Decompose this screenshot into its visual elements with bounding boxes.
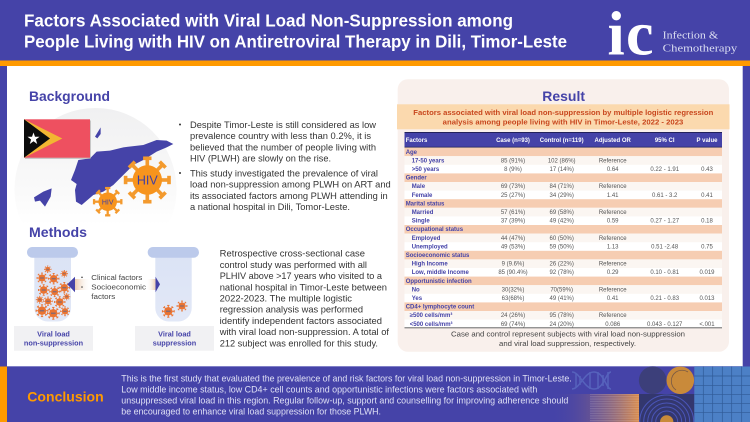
table header: P value bbox=[697, 138, 718, 144]
background text: This study investigated the prevalence of viral bbox=[190, 167, 378, 178]
factor list: factors bbox=[91, 292, 116, 301]
section: marital status: 57 (61%) bbox=[501, 210, 525, 216]
decoration: gradient stripes bbox=[550, 394, 639, 422]
section: occupational status: Employed bbox=[412, 236, 441, 242]
arrow: left bbox=[67, 277, 91, 292]
section: opportunistic infection: No bbox=[412, 287, 420, 293]
section: opportunistic infection: 49 (41%) bbox=[550, 296, 574, 302]
section: CD4+ lymphocyte count: <500 cells/mm³ bbox=[410, 321, 453, 328]
section: socioeconomic status bbox=[406, 253, 715, 276]
methods text: with viral load non-suppression. A total of bbox=[219, 326, 389, 337]
background text: believed that the number of people living with bbox=[190, 141, 376, 152]
factor list: Socioeconomic bbox=[91, 283, 146, 292]
title: Factors Associated with Viral Load Non-Suppression among bbox=[24, 11, 513, 31]
methods text bbox=[219, 248, 389, 348]
map of Timor-Leste bbox=[34, 127, 173, 207]
section: age: 8 (9%) bbox=[504, 167, 522, 173]
section: CD4+ lymphocyte count: 24 (20%) bbox=[550, 322, 574, 328]
methods text: control study was performed with all bbox=[220, 259, 367, 270]
right sidebar bbox=[743, 66, 750, 366]
section: CD4+ lymphocyte count: 0.043 - 0.127 bbox=[647, 322, 683, 328]
section: opportunistic infection: 0.41 bbox=[607, 296, 619, 302]
label: viral load suppression: suppression bbox=[153, 339, 196, 348]
section: socioeconomic status: Reference bbox=[599, 262, 627, 268]
methods text: national hospital in Timor-Leste between bbox=[220, 281, 387, 292]
section: CD4+ lymphocyte count: Reference bbox=[599, 313, 627, 319]
section: age: >50 years bbox=[412, 167, 440, 173]
methods text: regression analysis was performed bbox=[220, 304, 363, 315]
table title band: Factors associated with viral load non-suppression by multiple logistic regression bbox=[413, 108, 714, 117]
conclusion text bbox=[121, 373, 572, 416]
section: age: 17-50 years bbox=[412, 158, 445, 164]
conclusion text: be encouraged to enhance viral load suppression for those PLWH. bbox=[121, 405, 381, 416]
section: occupational status: 0.75 bbox=[701, 244, 713, 250]
conclusion text: This is the first study that evaluated the prevalence of and risk factors for viral load non-suppression in Timor-Leste. bbox=[121, 373, 572, 384]
methods text: 2022-2023. The multiple logistic bbox=[220, 292, 352, 304]
table header bbox=[404, 132, 722, 148]
section: marital status: Married bbox=[412, 210, 434, 216]
section: gender: 34 (29%) bbox=[550, 193, 574, 199]
section: occupational status: 44 (47%) bbox=[501, 236, 525, 242]
tube: viral load non-suppression bbox=[27, 247, 78, 322]
section: CD4+ lymphocyte count: CD4+ lymphocyte count bbox=[406, 305, 474, 311]
conclusion text: unsuppressed viral load in this region. Regular follow-up, support and counselling for improving adherence should bbox=[121, 394, 568, 406]
section: age: 85 (91%) bbox=[501, 158, 525, 164]
section: CD4+ lymphocyte count: 69 (74%) bbox=[501, 322, 525, 328]
conclusion band bbox=[0, 366, 750, 422]
table header: Adjusted OR bbox=[595, 138, 632, 144]
section: occupational status: 0.51 -2.48 bbox=[651, 244, 679, 250]
table footnote bbox=[451, 330, 685, 348]
section: marital status: 0.18 bbox=[701, 219, 713, 225]
section: gender: Gender bbox=[406, 176, 427, 182]
section: occupational status: Reference bbox=[599, 236, 627, 242]
section: age bbox=[406, 150, 713, 173]
section: socioeconomic status: 92 (78%) bbox=[550, 270, 574, 276]
label: viral load non-suppression: non-suppression bbox=[24, 339, 83, 348]
table rows backgrounds bbox=[404, 148, 722, 328]
section: opportunistic infection: 63(68%) bbox=[502, 296, 524, 302]
section: marital status: Reference bbox=[599, 210, 627, 216]
journal logo bbox=[608, 0, 738, 68]
section: marital status: 69 (58%) bbox=[550, 210, 574, 216]
section: marital status: 0.59 bbox=[607, 219, 619, 225]
table header: Control (n=119) bbox=[540, 138, 584, 144]
table title band: analysis among people living with HIV in Timor-Leste, 2022 - 2023 bbox=[443, 117, 683, 126]
background text: HIV (PLWH) are slowly on the rise. bbox=[190, 152, 331, 164]
title bbox=[24, 11, 567, 52]
section: age: 0.43 bbox=[701, 167, 713, 173]
title: People Living with HIV on Antiretroviral Therapy in Dili, Timor-Leste bbox=[24, 32, 567, 52]
methods text: identify independent factors associated bbox=[220, 315, 382, 326]
section: socioeconomic status: 26 (22%) bbox=[550, 262, 574, 268]
section: socioeconomic status: 85 (90.4%) bbox=[498, 270, 528, 276]
section: socioeconomic status: Socioeconomic status bbox=[406, 253, 470, 259]
table title band bbox=[397, 104, 730, 129]
panel: background bbox=[14, 88, 391, 225]
factor list: Clinical factors bbox=[91, 273, 143, 282]
section: gender: Reference bbox=[599, 184, 627, 190]
background text: prevalence country with less than 0.2%, it is bbox=[190, 130, 371, 141]
section: CD4+ lymphocyte count: 95 (78%) bbox=[550, 313, 574, 319]
heading: methods: Methods bbox=[29, 224, 87, 240]
section: marital status: 0.27 - 1.27 bbox=[650, 219, 680, 225]
journal logo: i bbox=[608, 0, 625, 68]
heading: background: Background bbox=[29, 88, 110, 104]
header band bbox=[0, 0, 750, 66]
section: CD4+ lymphocyte count bbox=[406, 305, 715, 328]
map backdrop circle bbox=[14, 108, 176, 225]
icon: large HIV virus: HIV bbox=[137, 174, 158, 188]
section: socioeconomic status: Low, middle Income bbox=[412, 270, 469, 276]
section: occupational status: 59 (50%) bbox=[550, 244, 574, 250]
section: opportunistic infection: 30(32%) bbox=[502, 287, 524, 293]
background text: load non-suppression among PLWH on ART and bbox=[190, 179, 391, 190]
label: viral load non-suppression: Viral load bbox=[37, 329, 70, 338]
background text: Despite Timor-Leste is still considered as low bbox=[190, 119, 376, 130]
section: occupational status bbox=[406, 227, 713, 250]
section: CD4+ lymphocyte count: 0.086 bbox=[605, 322, 621, 328]
section: age: 0.22 - 1.91 bbox=[650, 167, 680, 173]
section: gender: 1.41 bbox=[607, 193, 619, 199]
section: marital status: Marital status bbox=[406, 201, 445, 207]
section: gender: 84 (71%) bbox=[550, 184, 574, 190]
methods text: Retrospective cross-sectional case bbox=[220, 248, 365, 259]
section: age: Age bbox=[406, 150, 418, 156]
section: socioeconomic status: 0.29 bbox=[607, 270, 619, 276]
arrow: right bbox=[146, 277, 160, 292]
background text: its associated factors among PLWH attending in bbox=[190, 190, 388, 201]
icon: flag of Timor-Leste bbox=[24, 119, 91, 159]
section: gender: 69 (73%) bbox=[501, 184, 525, 190]
journal logo: Infection & bbox=[663, 30, 718, 42]
table header: 95% CI bbox=[655, 138, 675, 144]
section: occupational status: 60 (50%) bbox=[550, 236, 574, 242]
section: gender: 25 (27%) bbox=[501, 193, 525, 199]
panel: result bbox=[397, 79, 730, 352]
section: age: 102 (86%) bbox=[548, 158, 576, 164]
icon: small HIV virus: HIV bbox=[102, 199, 114, 206]
section: age: 17 (14%) bbox=[550, 167, 574, 173]
section: marital status bbox=[406, 201, 713, 225]
section: CD4+ lymphocyte count: <.001 bbox=[699, 322, 715, 328]
journal logo: c bbox=[626, 0, 654, 68]
methods text: 212 subject was enrolled for this study. bbox=[220, 337, 378, 348]
label: viral load non-suppression bbox=[14, 326, 93, 351]
background text: a national hospital in Dili, Tomor-Leste. bbox=[190, 201, 350, 212]
conclusion text: Low middle income status, low CD4+ cell counts and opportunistic infections were factors associated with bbox=[121, 384, 537, 395]
left sidebar bbox=[0, 66, 7, 366]
section: gender: 0.61 - 3.2 bbox=[652, 193, 678, 199]
journal logo: Chemotherapy bbox=[663, 44, 738, 54]
section: age: 0.64 bbox=[607, 167, 619, 173]
table footnote: Case and control represent subjects with viral load non-suppression bbox=[451, 330, 685, 339]
section: opportunistic infection: Yes bbox=[412, 296, 423, 302]
icon: large HIV virus bbox=[126, 158, 169, 202]
section: CD4+ lymphocyte count: ≥500 cells/mm³ bbox=[410, 312, 452, 319]
section: occupational status: Occupational status bbox=[406, 227, 464, 233]
section: opportunistic infection: 0.21 - 0.83 bbox=[650, 296, 680, 302]
factor list bbox=[81, 273, 146, 301]
section: opportunistic infection bbox=[406, 279, 715, 302]
section: gender: 0.41 bbox=[701, 193, 713, 199]
label: viral load suppression: Viral load bbox=[158, 329, 191, 338]
section: socioeconomic status: 9 (9.6%) bbox=[502, 262, 524, 268]
section: occupational status: 1.13 bbox=[607, 244, 619, 250]
section: gender: Male bbox=[412, 184, 426, 190]
icon: small HIV virus bbox=[94, 188, 121, 215]
section: occupational status: 49 (53%) bbox=[501, 244, 525, 250]
section: age: Reference bbox=[599, 158, 627, 164]
section: opportunistic infection: Reference bbox=[599, 287, 627, 293]
decoration: concentric arcs bbox=[639, 394, 694, 422]
decoration: circles bbox=[639, 366, 694, 394]
section: opportunistic infection: 0.013 bbox=[699, 296, 715, 302]
heading: result: Result bbox=[542, 88, 585, 104]
decoration: DNA helix bbox=[572, 372, 611, 389]
tube: viral load suppression bbox=[148, 247, 199, 322]
panel: methods bbox=[14, 224, 389, 351]
methods text: PLHIV above >17 years who visited to a bbox=[220, 270, 383, 281]
section: opportunistic infection: Opportunistic infection bbox=[406, 279, 472, 285]
section: marital status: Single bbox=[412, 219, 430, 225]
section: occupational status: Unemployed bbox=[412, 244, 448, 250]
decoration: grid block bbox=[694, 366, 750, 422]
heading: conclusion: Conclusion bbox=[27, 388, 104, 404]
results table bbox=[404, 132, 722, 328]
background text bbox=[179, 119, 391, 212]
section: marital status: 37 (39%) bbox=[501, 219, 525, 225]
table header: Case (n=93) bbox=[496, 138, 530, 144]
table footnote: and viral load suppression, respectively. bbox=[499, 339, 636, 348]
table header: Factors bbox=[406, 138, 428, 144]
section: opportunistic infection: 70(59%) bbox=[550, 287, 573, 293]
section: marital status: 49 (42%) bbox=[550, 219, 574, 225]
label: viral load suppression bbox=[135, 326, 214, 351]
section: socioeconomic status: 0.019 bbox=[699, 270, 715, 276]
section: gender bbox=[406, 176, 713, 199]
section: gender: Female bbox=[412, 193, 433, 199]
section: CD4+ lymphocyte count: 24 (26%) bbox=[501, 313, 525, 319]
section: socioeconomic status: 0.10 - 0.81 bbox=[650, 270, 680, 276]
section: socioeconomic status: High Income bbox=[412, 262, 448, 268]
